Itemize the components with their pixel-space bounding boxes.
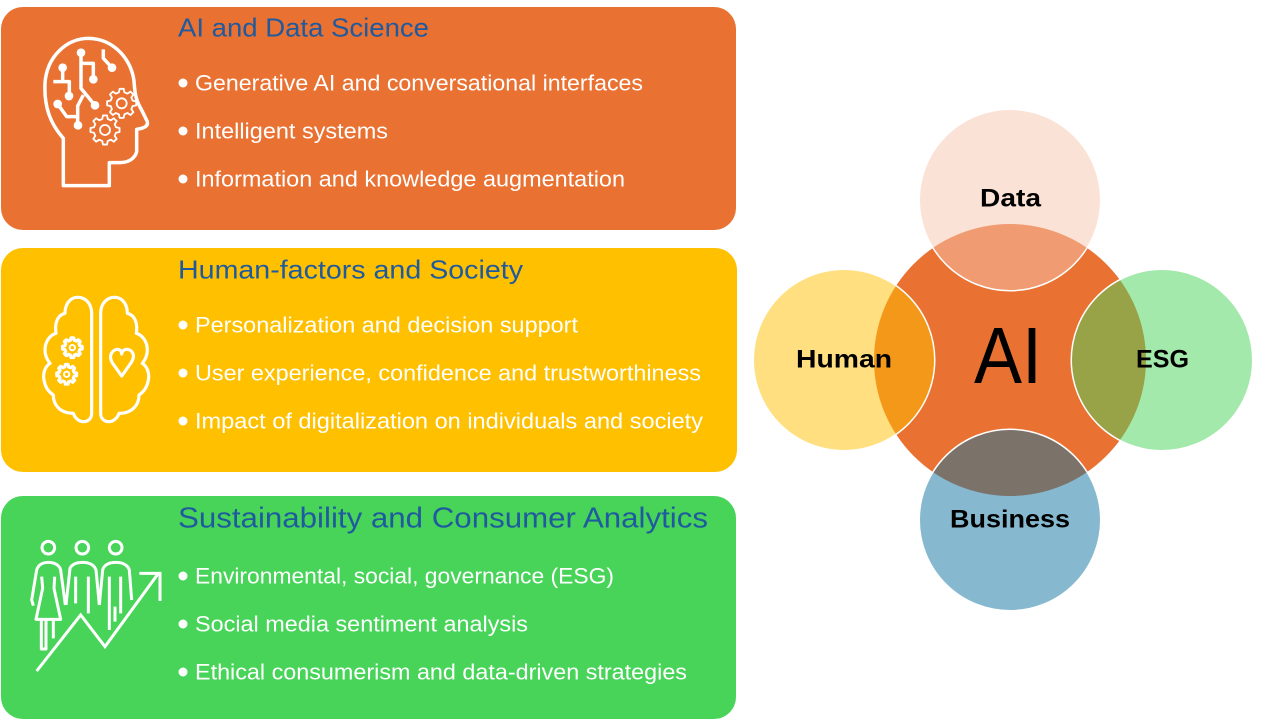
heading: Sustainability and Consumer Analytics: Sustainability and Consumer Analytics bbox=[178, 502, 708, 534]
bullet list: AI and Data Science: Intelligent systems bbox=[195, 118, 388, 144]
bullet list: AI and Data Science: Generative AI and conversational interfaces bbox=[195, 70, 643, 96]
circle: Human bbox=[753, 269, 935, 451]
bullet list: AI and Data Science bbox=[178, 70, 643, 192]
circle: Data bbox=[919, 109, 1101, 291]
bullet list: Human-factors and Society bbox=[178, 312, 703, 434]
diagram: AI overlapping circles bbox=[753, 109, 1253, 611]
bullet list: Human-factors and Society: User experience, confidence and trustworthiness bbox=[195, 360, 701, 386]
center circle: AI bbox=[874, 224, 1146, 496]
icon: people with rising arrow bbox=[32, 541, 160, 671]
bullet list: Sustainability and Consumer Analytics: Social media sentiment analysis bbox=[195, 612, 528, 636]
icon: brain with gears and heart bbox=[44, 297, 149, 422]
label: Business: Business bbox=[950, 506, 1070, 534]
panel: Human-factors and Society bbox=[1, 248, 737, 472]
label: Human: Human bbox=[796, 346, 892, 374]
label: ESG: ESG bbox=[1136, 346, 1189, 374]
bullet list: Sustainability and Consumer Analytics: Ethical consumerism and data-driven strategies bbox=[195, 660, 687, 684]
bullet list: Human-factors and Society: Impact of digitalization on individuals and society bbox=[195, 408, 703, 434]
panel: Sustainability and Consumer Analytics bbox=[1, 496, 736, 719]
heading: Human-factors and Society: Human-factors and Society bbox=[178, 254, 523, 284]
icon: head with circuits and gears bbox=[45, 38, 147, 186]
bullet list: Sustainability and Consumer Analytics bbox=[178, 564, 687, 684]
bullet list: Human-factors and Society: Personalization and decision support bbox=[195, 312, 578, 338]
label: Data: Data bbox=[980, 184, 1042, 212]
panel: AI and Data Science bbox=[1, 7, 736, 230]
bullet list: Sustainability and Consumer Analytics: Environmental, social, governance (ESG) bbox=[195, 564, 614, 588]
circle: Business bbox=[919, 429, 1101, 611]
label: AI: AI bbox=[974, 311, 1042, 400]
heading: AI and Data Science: AI and Data Science bbox=[178, 12, 429, 42]
circle: ESG bbox=[1071, 269, 1253, 451]
bullet list: AI and Data Science: Information and knowledge augmentation bbox=[195, 166, 625, 192]
